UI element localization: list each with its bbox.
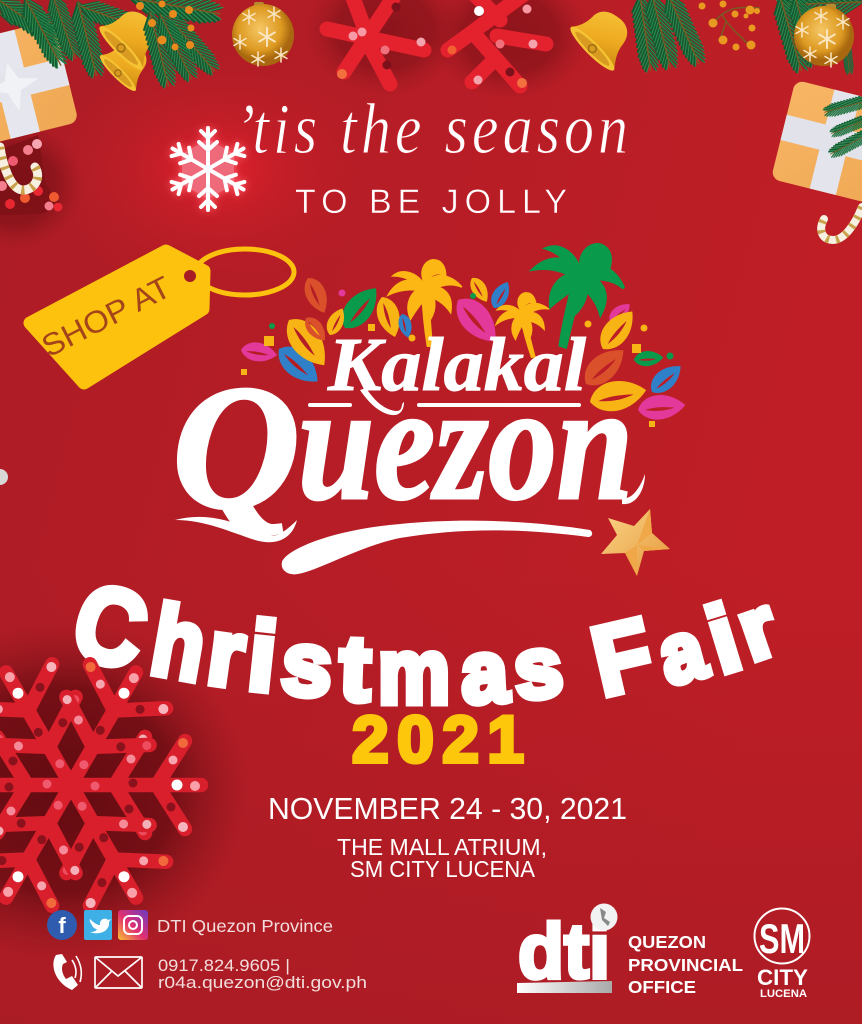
large red snowflake xyxy=(0,647,201,923)
glowing snowflake xyxy=(168,128,248,210)
candy cane right xyxy=(821,207,862,240)
logo word: Quezon xyxy=(172,348,645,574)
venue: THE MALL ATRIUM, xyxy=(337,834,547,860)
gift box left xyxy=(0,20,79,150)
logo decoration: leaves and palms xyxy=(240,227,687,427)
office label: OFFICE xyxy=(628,977,696,997)
subheading: TO BE JOLLY xyxy=(295,183,567,221)
snowflake: top red left xyxy=(327,0,426,84)
icon: instagram xyxy=(118,910,148,940)
berries xyxy=(698,0,760,50)
heading: Christmas Fair: s xyxy=(279,613,336,717)
gold star xyxy=(601,509,670,576)
script heading: ’tis the season xyxy=(235,90,628,169)
heading: Christmas Fair: F xyxy=(582,598,663,717)
venue: SM CITY LUCENA xyxy=(350,856,536,882)
heading: Christmas Fair: t xyxy=(338,618,372,721)
heading: Christmas Fair: m xyxy=(378,621,450,723)
contact details: r04a.quezon@dti.gov.ph xyxy=(158,973,367,992)
office label: PROVINCIAL xyxy=(628,955,743,975)
office label: QUEZON xyxy=(628,932,706,952)
heading: Christmas Fair xyxy=(61,559,789,723)
icon: phone xyxy=(53,954,81,990)
event date: NOVEMBER 24 - 30, 2021 xyxy=(268,791,627,826)
dti logo: dti xyxy=(518,907,610,995)
shop tag: SHOP AT xyxy=(36,269,177,364)
logo word: Quezon: uezon xyxy=(298,351,633,534)
logo swash xyxy=(282,521,592,574)
year: 2021 xyxy=(352,702,524,776)
shop tag xyxy=(30,249,294,383)
logo word: Quezon: Q xyxy=(172,348,300,546)
knob at left edge xyxy=(0,469,8,485)
heading: Christmas Fair: s xyxy=(509,618,567,718)
logo rules xyxy=(308,403,581,407)
heading: Christmas Fair: a xyxy=(459,622,511,723)
pine on right gift xyxy=(822,94,862,160)
ornament left xyxy=(232,2,294,66)
contact details xyxy=(158,956,367,992)
icon: envelope xyxy=(95,957,142,988)
candy cane left xyxy=(0,147,38,190)
social icons xyxy=(47,910,148,940)
heading: Christmas Fair: r xyxy=(726,578,789,679)
pine branches: top left xyxy=(0,0,224,80)
SM City Lucena logo: LUCENA xyxy=(760,988,807,1000)
social handle: DTI Quezon Province xyxy=(157,916,333,936)
pine over bell xyxy=(136,0,223,90)
office label xyxy=(628,932,743,997)
venue xyxy=(337,834,547,882)
contact details: 0917.824.9605 | xyxy=(158,956,290,975)
pine branches: top right xyxy=(630,0,862,75)
ornament right xyxy=(794,4,854,67)
SM City Lucena logo xyxy=(754,908,810,1000)
bell right xyxy=(566,0,643,75)
SM City Lucena logo: SM xyxy=(759,915,805,962)
icon: twitter xyxy=(84,910,112,940)
icon: facebook: f xyxy=(58,913,66,938)
heading: Christmas Fair: C xyxy=(61,559,160,694)
small partial snowflake under left gift xyxy=(0,135,62,215)
heading: Christmas Fair: h xyxy=(144,583,214,703)
heading: Christmas Fair: i xyxy=(243,600,282,712)
SM City Lucena logo: CITY xyxy=(757,965,808,990)
bells left xyxy=(95,0,171,94)
gift box right xyxy=(771,80,862,210)
heading: Christmas Fair: r xyxy=(202,599,251,708)
snowflake: top red right xyxy=(448,0,546,88)
logo word: Kalakal: Kalakal xyxy=(327,323,586,407)
heading: Christmas Fair: a xyxy=(649,602,716,704)
heading: Christmas Fair: i xyxy=(696,585,751,693)
